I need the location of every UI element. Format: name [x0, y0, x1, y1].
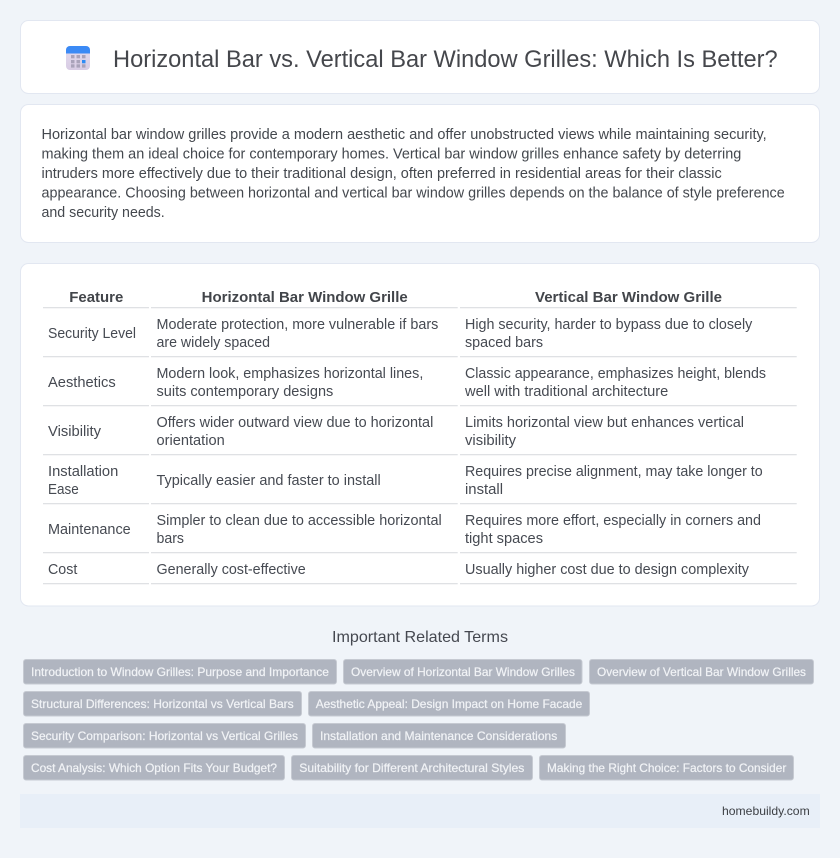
row: security level: Security Level: [48, 326, 136, 342]
row: aesthetics: well with traditional architecture: [464, 384, 668, 400]
row: visibility: Offers wider outward view due to horizontal: [156, 415, 433, 431]
row: installation ease: Installation: [48, 464, 118, 480]
panel: comparison table: [20, 264, 820, 606]
row: visibility: [48, 415, 744, 449]
row: maintenance: Simpler to clean due to accessible horizontal: [156, 513, 442, 529]
panel: title header: [20, 20, 820, 94]
row: cost: [48, 562, 750, 578]
row: visibility: orientation: [156, 433, 225, 449]
table header row: [69, 290, 722, 306]
text block: introduction paragraph: making them an ideal choice for contemporary homes. Vertical bar window grilles enhance safety by deterring: [42, 146, 741, 162]
panel: related term tags: Security Comparison: Horizontal vs Vertical Grilles: [31, 729, 298, 743]
text block: introduction paragraph: Horizontal bar window grilles provide a modern aesthetic and offer unobstructed views while maintaining security,: [42, 127, 767, 143]
row: maintenance: tight spaces: [465, 531, 543, 547]
row: maintenance: bars: [156, 531, 184, 547]
row: installation ease: [48, 464, 763, 498]
row: cost: Usually higher cost due to design complexity: [465, 562, 750, 578]
row: security level: are widely spaced: [156, 335, 270, 351]
row: security level: spaced bars: [465, 335, 543, 351]
panel: introduction: [20, 104, 820, 242]
text block: introduction paragraph: and security needs.: [42, 205, 165, 221]
row: cost: Generally cost-effective: [156, 562, 306, 578]
row: aesthetics: [48, 366, 766, 400]
text block: introduction paragraph: [42, 127, 785, 221]
table header row: Feature: [69, 290, 123, 306]
panel: related term tags: [24, 660, 814, 780]
row: installation ease: Requires precise alignment, may take longer to: [465, 464, 763, 480]
row: aesthetics: suits contemporary designs: [156, 384, 333, 400]
row: aesthetics: Classic appearance, emphasizes height, blends: [465, 366, 766, 382]
row: visibility: Limits horizontal view but enhances vertical: [465, 415, 744, 431]
panel: related term tags: Structural Differences: Horizontal vs Vertical Bars: [31, 697, 294, 711]
panel: related term tags: Installation and Maintenance Considerations: [320, 729, 557, 743]
footer bar: [20, 794, 820, 828]
panel: related term tags: Overview of Horizontal Bar Window Grilles: [351, 665, 575, 679]
text block: introduction paragraph: intruders more effectively due to their traditional design, often preferred in residential areas for their classic: [42, 166, 722, 182]
table header row: Vertical Bar Window Grille: [535, 290, 722, 306]
row: maintenance: [48, 513, 761, 547]
panel: related term tags: Cost Analysis: Which Option Fits Your Budget?: [31, 761, 277, 775]
row: cost: Cost: [48, 562, 77, 578]
row: visibility: Visibility: [48, 424, 102, 440]
row: security level: High security, harder to bypass due to closely: [465, 317, 753, 333]
icon: calendar: [66, 46, 90, 70]
row: visibility: visibility: [465, 433, 517, 449]
panel: related term tags: Overview of Vertical Bar Window Grilles: [597, 665, 806, 679]
title: Horizontal Bar vs. Vertical Bar Window Grilles: Which Is Better?: [113, 46, 778, 73]
row: security level: Moderate protection, more vulnerable if bars: [156, 317, 438, 333]
panel: related term tags: Making the Right Choice: Factors to Consider: [547, 761, 786, 775]
text block: introduction paragraph: appearance. Choosing between horizontal and vertical bar window grilles depends on the balance of style preference: [42, 186, 785, 202]
row: aesthetics: Aesthetics: [48, 375, 116, 391]
row: aesthetics: Modern look, emphasizes horizontal lines,: [156, 366, 423, 382]
row: maintenance: Requires more effort, especially in corners and: [465, 513, 761, 529]
table header row: Horizontal Bar Window Grille: [202, 290, 408, 306]
panel: related term tags: Introduction to Window Grilles: Purpose and Importance: [31, 665, 329, 679]
row: security level: [48, 317, 753, 351]
row: maintenance: Maintenance: [48, 522, 131, 538]
panel: related term tags: Aesthetic Appeal: Design Impact on Home Facade: [316, 697, 583, 711]
row: installation ease: Typically easier and faster to install: [156, 473, 381, 489]
row: installation ease: Ease: [48, 482, 79, 498]
heading: important related terms: Important Related Terms: [332, 629, 508, 646]
row: installation ease: install: [465, 482, 503, 498]
footer source text: homebuildy.com: [722, 804, 810, 818]
panel: related term tags: Suitability for Different Architectural Styles: [299, 761, 524, 775]
